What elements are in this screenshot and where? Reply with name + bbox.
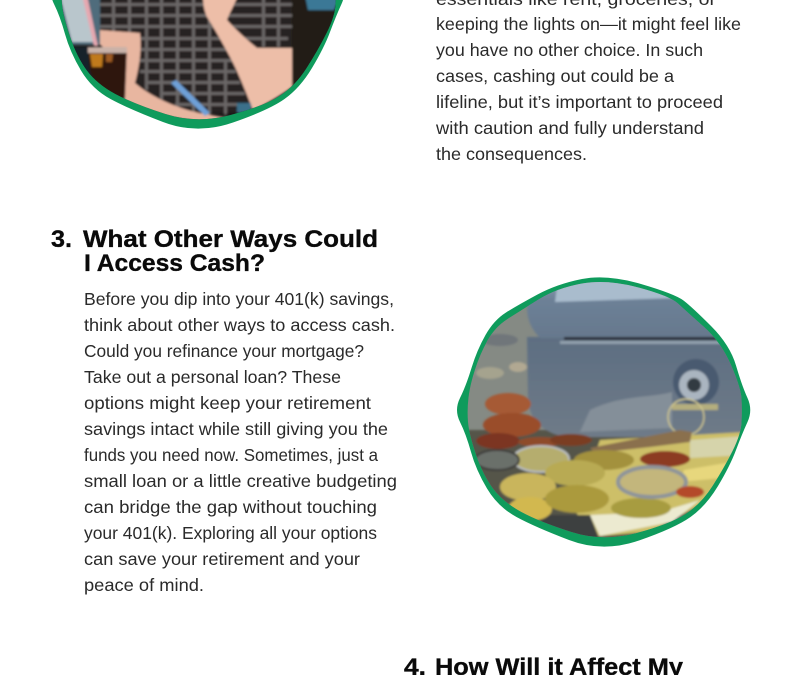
- lock: [673, 359, 719, 405]
- gold coins: [513, 446, 569, 472]
- text block: section 3 body: savings intact while still giving you the: [84, 419, 388, 439]
- heading: section 3: I Access Cash?: [84, 250, 265, 277]
- text block: section 3 body: options might keep your retirement: [84, 393, 371, 413]
- left arm: [100, 30, 228, 122]
- green blob behind photo: [51, 0, 344, 129]
- gravel background: [476, 367, 504, 379]
- text block: section 3 body: Before you dip into your 401(k) savings,: [84, 289, 394, 309]
- text block: section 3 body: Take out a personal loan? These: [84, 367, 341, 387]
- text block: section 3 body: your 401(k). Exploring all your options: [84, 523, 377, 543]
- text block: section 3 body: think about other ways to access cash.: [84, 315, 395, 335]
- right arm raised: [203, 0, 292, 110]
- text block: section 2 continuation: the consequences.: [436, 144, 587, 164]
- text block: section 3 body: can save your retirement and your: [84, 549, 360, 569]
- heading: section 3: [51, 226, 378, 277]
- text block: section 2 continuation: cases, cashing out could be a: [436, 66, 674, 86]
- text block: section 2 continuation: with caution and fully understand: [435, 118, 704, 138]
- blue bag edge: [237, 103, 251, 113]
- dark pebbles bottom: [540, 514, 600, 537]
- green blob behind photo: [457, 277, 750, 547]
- plaid shirt: [100, 0, 292, 112]
- heading: section 3: 3.: [51, 226, 72, 253]
- text block: section 3 body: can bridge the gap without touching: [84, 497, 377, 517]
- text block: section 3 body: small loan or a little creative budgeting: [84, 471, 397, 491]
- heading: section 3: What Other Ways Could: [83, 226, 378, 253]
- box lid: [526, 290, 714, 338]
- text block: section 3 body: Could you refinance your mortgage?: [84, 341, 364, 361]
- key: [590, 430, 692, 453]
- text block: section 2 continuation: you have no other choice. In such: [436, 40, 703, 60]
- box body: [527, 337, 745, 437]
- text block: section 3 body: [84, 289, 397, 595]
- text block: section 3 body: peace of mind.: [84, 575, 204, 595]
- straw: [82, 0, 98, 46]
- text block: section 2 continuation: lifeline, but it’s important to proceed: [436, 92, 723, 112]
- text block: section 2 continuation: [435, 0, 741, 164]
- paper notes: [575, 432, 745, 537]
- photo: cash box with key and coins: [457, 277, 750, 547]
- drink glass: [88, 48, 127, 99]
- seat / background left: [62, 0, 102, 47]
- copper coins: [485, 393, 531, 415]
- photo: person with plaid shirt, drink and pen: [51, 0, 345, 129]
- text block: section 3 body: funds you need now. Sometimes, just a: [84, 445, 378, 465]
- pen: [171, 80, 210, 116]
- text block: section 2 continuation: keeping the lights on—it might feel like: [436, 14, 741, 34]
